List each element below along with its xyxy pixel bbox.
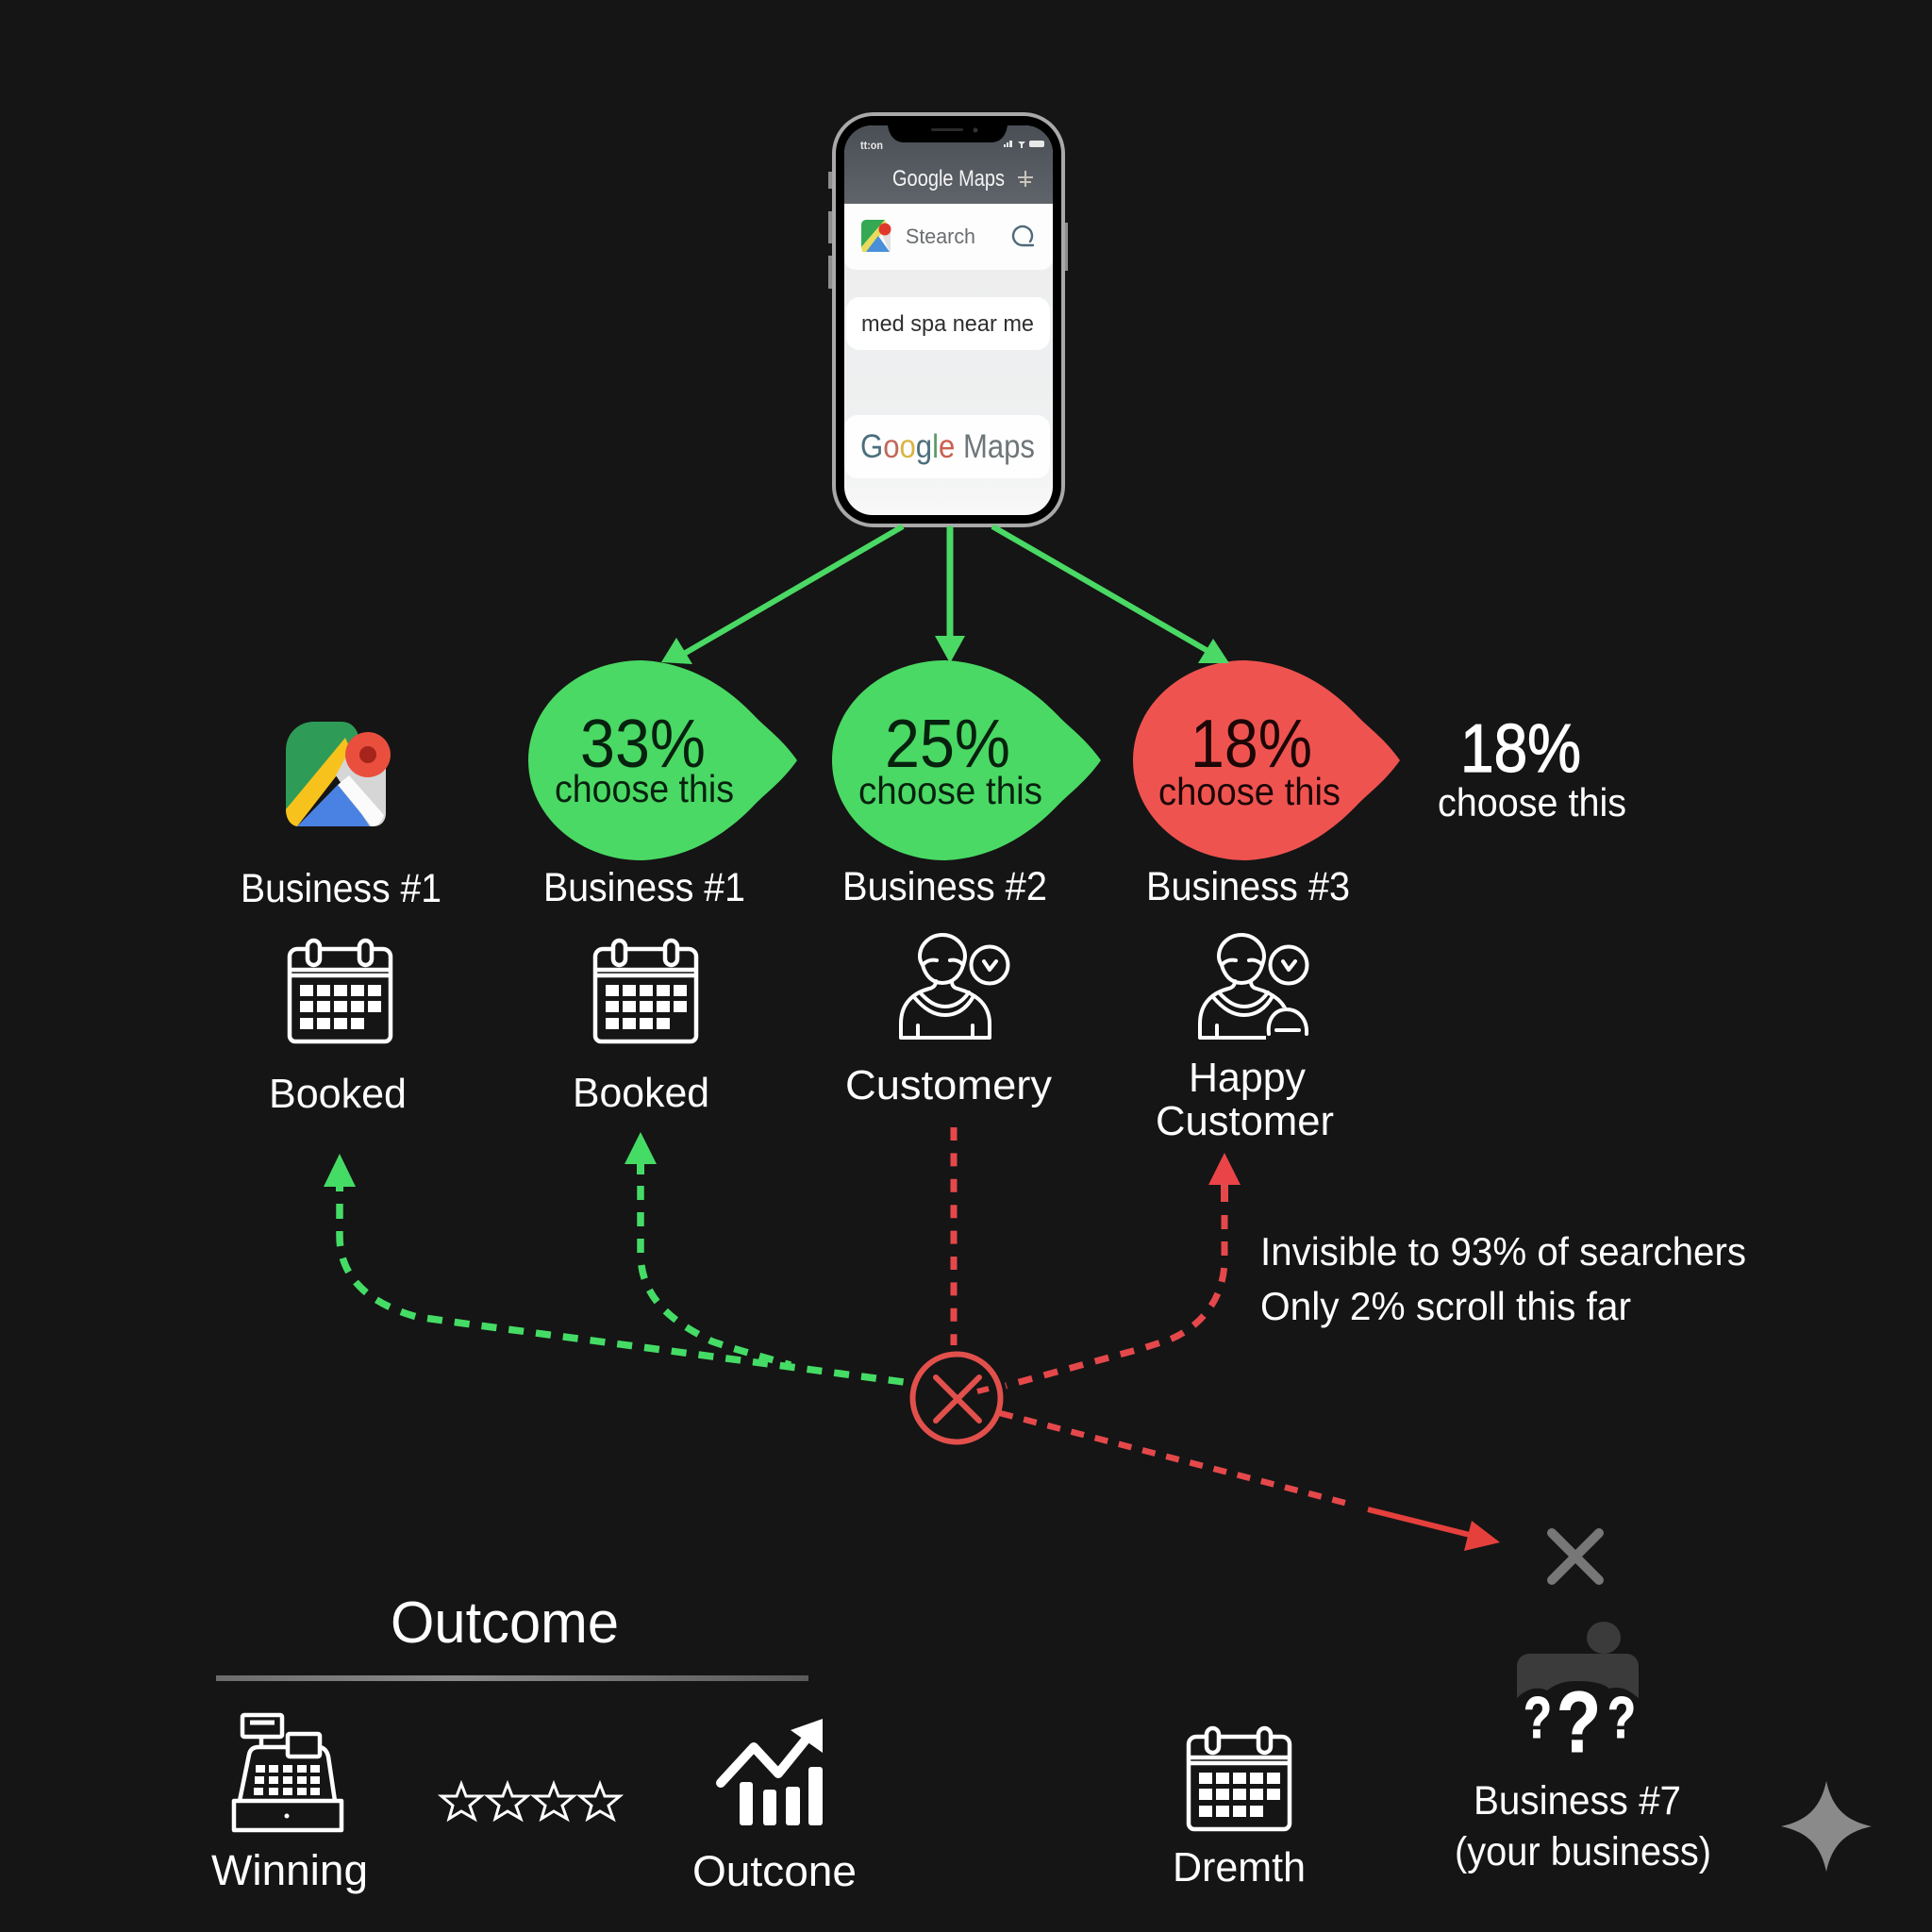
- label: business 7: (your business): [1455, 1829, 1711, 1874]
- column: maps icon business 1: [241, 722, 441, 911]
- label: Business #1: [241, 866, 441, 911]
- question marks: [1524, 1674, 1636, 1771]
- red arrow to business 7: [1000, 1413, 1500, 1551]
- teardrop: 33%: choose this: [555, 767, 734, 810]
- search placeholder: Stearch: [906, 225, 975, 248]
- question marks: ?: [1524, 1686, 1552, 1751]
- teardrop: 18%: [1133, 660, 1400, 860]
- callout: invisible: Invisible to 93% of searchers: [1260, 1229, 1746, 1274]
- google maps card: Google Maps: [860, 428, 1035, 465]
- red dashed line to customery: [951, 1127, 957, 1345]
- label: winning: Winning: [211, 1846, 368, 1894]
- teardrop: 18%: choose this: [1158, 770, 1341, 813]
- small maps icon: [861, 220, 891, 252]
- outcome labels: [269, 1055, 1334, 1144]
- callout: invisible: [1260, 1229, 1746, 1328]
- business labels: Business #2: [842, 864, 1047, 909]
- icon: sparkle: [1781, 1781, 1872, 1872]
- icon: unknown business: [1517, 1622, 1639, 1771]
- icon: customer: [901, 935, 1008, 1038]
- query card: med spa near me: [861, 311, 1034, 337]
- icon: growth chart: [721, 1719, 823, 1825]
- business labels: Business #3: [1146, 864, 1350, 909]
- icon: calendar 2: [595, 941, 696, 1041]
- callout: invisible: Only 2% scroll this far: [1260, 1284, 1631, 1328]
- icon: google maps pin: [286, 722, 391, 826]
- outcome labels: Booked: [269, 1071, 407, 1117]
- teardrop: 25%: 25%: [885, 707, 1010, 782]
- google maps card: [844, 415, 1050, 478]
- outcome labels: Happy: [1189, 1055, 1306, 1101]
- stat: 18% outside: choose this: [1438, 780, 1626, 824]
- teardrop: 25%: choose this: [858, 769, 1042, 812]
- icon: calendar 3: [1189, 1728, 1290, 1829]
- status icons: [1004, 141, 1044, 148]
- red x circle: [913, 1355, 1000, 1441]
- icon: calendar 1: [290, 941, 391, 1041]
- question marks: ?: [1607, 1686, 1636, 1751]
- red dashed arrow to business 3: [977, 1153, 1241, 1391]
- label: dremth: Dremth: [1173, 1844, 1306, 1890]
- phone header title: Google Maps: [892, 166, 1005, 192]
- icon: grey x: [1552, 1533, 1599, 1580]
- outcome labels: Customer: [1156, 1098, 1334, 1144]
- icon: cash register: [234, 1715, 341, 1830]
- phone mockup: [828, 114, 1068, 525]
- query card: [846, 297, 1050, 350]
- search icon: [1013, 226, 1033, 245]
- question marks: ?: [1557, 1674, 1601, 1771]
- icon: happy customer: [1200, 935, 1309, 1041]
- outcome labels: Booked: [573, 1070, 709, 1116]
- divider line: [216, 1675, 808, 1681]
- status bar time: tt:on: [860, 139, 883, 152]
- teardrop: 18%: 18%: [1191, 707, 1312, 782]
- teardrop: 33%: 33%: [580, 707, 706, 782]
- stat: 18% outside: [1438, 711, 1626, 824]
- green dashed arrow to business 1: [324, 1154, 904, 1382]
- teardrop: 33%: [528, 660, 797, 860]
- label: business 7: Business #7: [1474, 1778, 1681, 1824]
- business labels: Business #1: [543, 865, 745, 910]
- teardrop: 25%: [832, 660, 1101, 860]
- search card: [844, 204, 1053, 270]
- stat: 18% outside: 18%: [1460, 711, 1581, 787]
- icon: four stars: [441, 1784, 620, 1819]
- header glyph: [1018, 171, 1033, 187]
- green arrows from phone to results: [661, 526, 1229, 664]
- heading: outcome: Outcome: [391, 1591, 619, 1656]
- outcome labels: Customery: [845, 1062, 1052, 1108]
- label: outcone: Outcone: [692, 1847, 857, 1895]
- business labels: [543, 864, 1350, 910]
- green dashed arrow to business 1 second: [625, 1132, 791, 1365]
- label: business 7: [1455, 1778, 1711, 1874]
